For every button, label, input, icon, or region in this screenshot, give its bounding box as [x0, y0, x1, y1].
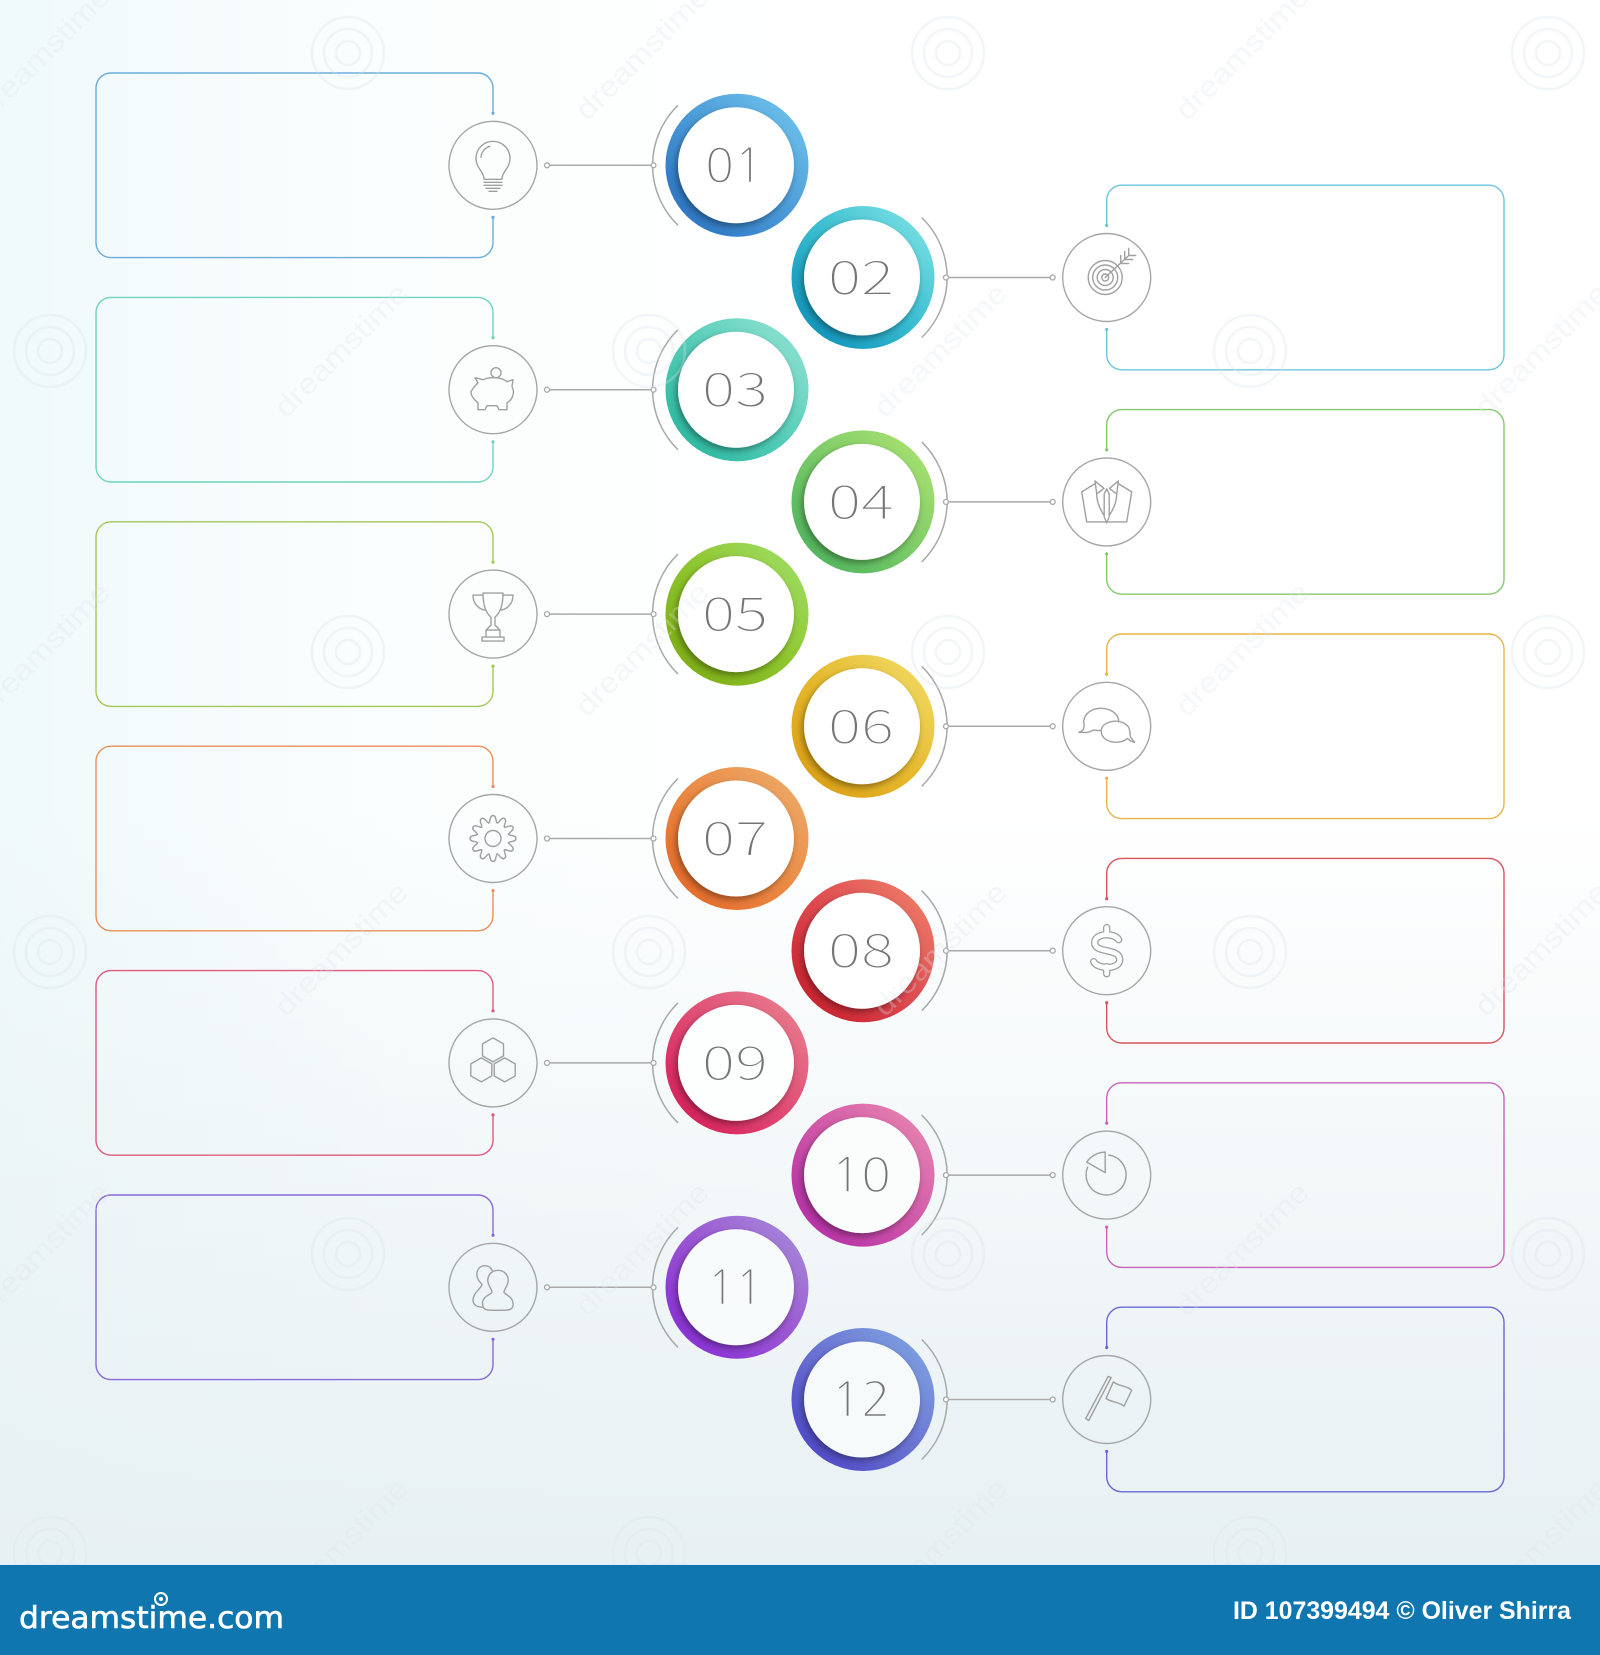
- icon: piggy bank: [449, 346, 537, 434]
- number ring 09: 09: [702, 1025, 768, 1094]
- number ring 07: 07: [702, 800, 768, 870]
- footer credit: ID 107399494 © Oliver Shirra: [1233, 1597, 1572, 1625]
- watermark overlay: dreamstime: [1169, 1176, 1316, 1323]
- panel: text box 03: [96, 297, 495, 482]
- number ring 09: [666, 991, 808, 1134]
- connector: [544, 1227, 678, 1347]
- icon: dollar sign: [1063, 907, 1151, 995]
- row 05: [96, 522, 808, 706]
- connector: [922, 1340, 1055, 1460]
- icon: suit jacket: [1063, 458, 1151, 546]
- row 08: [792, 858, 1504, 1043]
- number ring 01: 01: [705, 141, 763, 189]
- panel: text box 11: [96, 1195, 495, 1380]
- connector: [922, 442, 1055, 562]
- watermark overlay: dreamstime: [569, 0, 716, 127]
- row 06: [792, 634, 1504, 819]
- connector: [922, 666, 1055, 786]
- number ring 08: 08: [828, 913, 894, 982]
- row 12: [792, 1307, 1504, 1492]
- panel: text box 06: [1105, 634, 1504, 819]
- watermark overlay: dreamstime: [1468, 277, 1600, 424]
- connector: [544, 105, 678, 225]
- number ring 12: [792, 1328, 934, 1471]
- icon: flag: [1063, 1356, 1151, 1444]
- number ring 12: 12: [831, 1376, 891, 1424]
- icon: target with arrow: [1063, 234, 1151, 322]
- number ring 03: 03: [702, 352, 768, 421]
- number ring 04: 04: [828, 464, 894, 533]
- footer logo: dreamstime.com: [19, 1601, 284, 1636]
- row 02: [792, 185, 1504, 370]
- panel: text box 01: [96, 73, 495, 258]
- number ring 10: [792, 1104, 934, 1247]
- number ring 11: [666, 1216, 808, 1359]
- row 07: [96, 746, 808, 931]
- icon: light bulb: [449, 121, 537, 209]
- watermark overlay: dreamstime: [867, 277, 1014, 424]
- number ring 01: [666, 94, 808, 237]
- panel: text box 04: [1105, 410, 1504, 594]
- icon: users: [449, 1243, 537, 1331]
- connector: [544, 330, 678, 450]
- panel: text box 02: [1105, 185, 1504, 370]
- number ring 03: [666, 318, 808, 461]
- watermark overlay: dreamstime: [867, 876, 1014, 1023]
- watermark overlay: dreamstime: [268, 277, 415, 424]
- row 09: [96, 971, 808, 1155]
- number ring 06: 06: [828, 688, 894, 757]
- number ring 04: [792, 430, 934, 573]
- row 04: [792, 410, 1504, 594]
- row 01: [96, 73, 808, 258]
- connector: [544, 1003, 678, 1123]
- watermark overlay: dreamstime: [867, 1472, 1014, 1619]
- number ring 06: [792, 655, 934, 798]
- connector: [544, 554, 678, 674]
- icon: trophy: [449, 570, 537, 658]
- watermark overlay: dreamstime: [268, 876, 415, 1023]
- connector: [922, 218, 1055, 338]
- icon: hexagons: [449, 1019, 537, 1107]
- number ring 08: [792, 879, 934, 1022]
- number ring 02: 02: [828, 240, 894, 308]
- panel: text box 10: [1105, 1083, 1504, 1267]
- watermark overlay: dreamstime: [1468, 1472, 1600, 1619]
- icon: pie chart: [1063, 1131, 1151, 1219]
- panel: text box 05: [96, 522, 495, 706]
- panel: text box 08: [1105, 858, 1504, 1043]
- panel: text box 09: [96, 971, 495, 1155]
- row 11: [96, 1195, 808, 1380]
- row 10: [792, 1083, 1504, 1267]
- connector: [922, 891, 1055, 1011]
- panel: text box 07: [96, 746, 495, 931]
- number ring 02: [792, 206, 934, 349]
- number ring 05: 05: [702, 576, 768, 645]
- number ring 07: [666, 767, 808, 910]
- watermark overlay: dreamstime: [569, 1176, 716, 1323]
- number ring 11: 11: [707, 1263, 763, 1311]
- watermark overlay: dreamstime: [268, 1472, 415, 1619]
- watermark overlay: dreamstime: [569, 576, 716, 723]
- panel: text box 12: [1105, 1307, 1504, 1492]
- number ring 10: 10: [831, 1151, 891, 1199]
- connector: [544, 778, 678, 898]
- icon: speech bubbles: [1063, 682, 1151, 770]
- footer bar: [0, 1564, 1600, 1655]
- watermark overlay: dreamstime: [1169, 0, 1316, 127]
- icon: gear: [449, 794, 537, 882]
- number ring 05: [666, 543, 808, 686]
- watermark overlay: dreamstime: [1468, 876, 1600, 1023]
- row 03: [96, 297, 808, 482]
- watermark overlay: dreamstime: [1169, 576, 1316, 723]
- connector: [922, 1115, 1055, 1235]
